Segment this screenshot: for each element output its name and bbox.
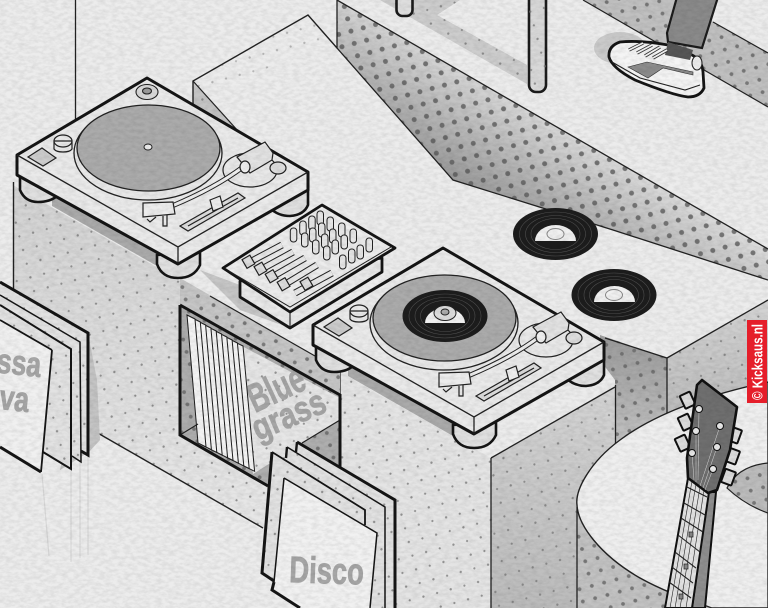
- pitch slider: [180, 193, 245, 231]
- record stack: Disco: [262, 442, 395, 608]
- sneaker and trouser leg: [609, 0, 718, 97]
- trouser leg: [667, 0, 718, 48]
- shaded stage riser wedge: [337, 0, 768, 280]
- disco title: Disco: [289, 549, 365, 593]
- left cabinet face: [13, 182, 340, 540]
- front sleeve: [272, 478, 377, 608]
- wall corner line: [74, 0, 76, 125]
- pitch slider: [476, 363, 541, 401]
- foot shadow band: [583, 0, 768, 107]
- stack shadow: [60, 333, 100, 470]
- fret markers: [679, 532, 693, 599]
- start button: [324, 318, 352, 336]
- feet: [316, 345, 604, 448]
- back sleeves: [0, 282, 88, 469]
- mixer faders: [242, 245, 332, 293]
- start button: [28, 148, 56, 166]
- mixer top: [223, 205, 395, 312]
- credit tag: © Kicksaus.nl: [750, 324, 766, 400]
- platter: [370, 275, 518, 370]
- platter: [74, 105, 222, 200]
- bluegrass sleeve: Blue: [240, 356, 312, 421]
- headstock: [687, 380, 737, 493]
- shadow: [52, 195, 157, 266]
- credit tag: [747, 320, 767, 403]
- body: [17, 78, 308, 264]
- mixer: [200, 205, 395, 328]
- turntable left: [17, 78, 308, 278]
- filed record sleeves: [187, 315, 255, 471]
- raised block top: [193, 15, 337, 131]
- knob: [54, 135, 72, 152]
- tonearm: [439, 312, 582, 396]
- feet: [20, 175, 308, 278]
- tonearm: [143, 142, 286, 226]
- frets and strings: [669, 481, 707, 608]
- vinyl on platter: [402, 290, 488, 342]
- mixer base: [240, 258, 382, 328]
- record stack: Bossa Nova: [0, 282, 100, 562]
- sneaker: [609, 41, 704, 97]
- right cabinet front face: [340, 372, 616, 608]
- bluegrass sleeve: [240, 345, 340, 474]
- guitar: [665, 380, 742, 608]
- chair leg shadow: [380, 0, 527, 84]
- round guitar platform: [577, 382, 768, 608]
- floor reflection: [42, 456, 88, 562]
- guitar neck: [692, 492, 716, 608]
- top mount: [136, 84, 158, 100]
- chair legs: [396, 0, 546, 92]
- knob: [350, 305, 368, 322]
- loose vinyl record two: [572, 269, 656, 321]
- mixer knobs: [290, 211, 372, 269]
- stage side faces: [600, 300, 768, 445]
- right cabinet side face: [491, 387, 615, 608]
- mixer shadow: [200, 270, 290, 328]
- loose vinyl record one: [513, 208, 598, 260]
- front sleeve: [0, 320, 52, 472]
- tuning pegs: [675, 392, 742, 486]
- bluegrass sleeve: grass: [245, 380, 332, 448]
- body: [313, 248, 604, 434]
- shelf band above record cubby: [180, 278, 340, 395]
- shadow: [348, 365, 453, 436]
- turntable right: [313, 248, 604, 448]
- tuner posts and strings: [688, 406, 724, 490]
- record cubby: [180, 305, 340, 486]
